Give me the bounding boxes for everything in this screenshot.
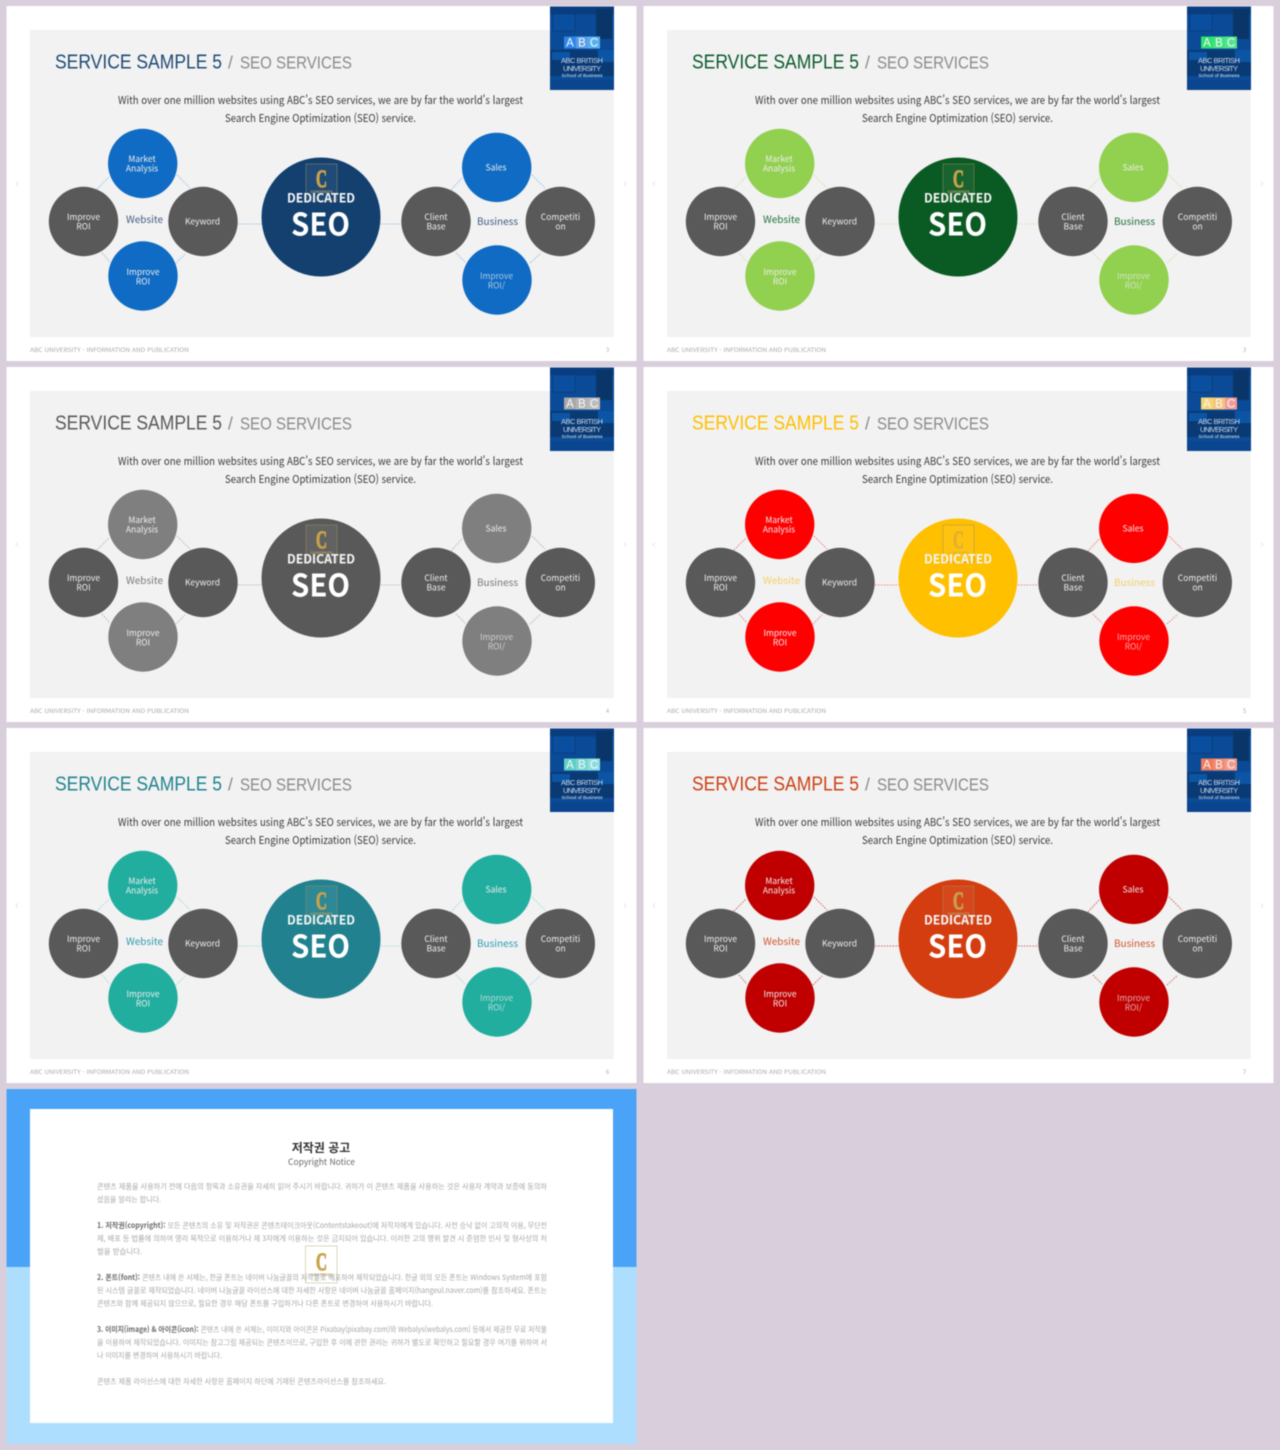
central SEO circle <box>898 880 1018 998</box>
website cluster: Website <box>126 933 164 948</box>
notice text: font: 된 시스템 글꼴로 제작되었습니다. 네이버 나눔글꼴 라이선스에 대한 자세한 사항은 네이버 나눔글꼴 홈페이지(hangeul.naver.com)를 참조하세요. 폰트는 <box>97 1285 547 1296</box>
intro text <box>118 92 523 126</box>
notice text: copyright: 1. 저작권(copyright): 모든 콘텐츠의 소유 및 저작권은 콘텐츠테이크아웃(Contentstakeout)에 저작자에게 있습니다. 사전 승낙 없이 고의적 이용, 무단전 <box>97 1220 547 1231</box>
heading: SEO SERVICES <box>877 52 989 72</box>
business cluster: Base <box>426 942 446 954</box>
navigation arrows: ‹ <box>652 898 656 912</box>
website cluster: ROI <box>773 636 787 648</box>
logo: ABC British University <box>1187 368 1251 451</box>
website cluster: ROI <box>136 636 150 648</box>
business cluster: Client <box>1061 933 1085 945</box>
website cluster: Market <box>128 153 156 165</box>
website cluster: Website <box>763 572 801 587</box>
logo: ABC British University: UNIVERSITY <box>563 786 601 795</box>
business cluster: Base <box>426 582 446 594</box>
heading <box>55 412 352 434</box>
logo: ABC British University <box>1187 728 1251 812</box>
business cluster: Business <box>477 935 518 950</box>
connectors <box>734 897 1182 985</box>
business cluster: Base <box>1063 942 1083 954</box>
central SEO circle: CONTENTS <box>310 550 333 555</box>
website cluster: Analysis <box>763 162 795 174</box>
connectors <box>97 175 545 263</box>
website cluster: ROI <box>713 582 728 594</box>
website cluster <box>686 490 875 672</box>
website cluster: Improve <box>763 266 797 278</box>
navigation arrows: ‹ <box>652 537 656 551</box>
central SEO circle: C <box>316 888 327 915</box>
navigation arrows: ‹ <box>15 176 19 190</box>
footer <box>667 346 1246 354</box>
business cluster: Business <box>1114 213 1155 228</box>
business cluster: ROI/ <box>488 280 506 292</box>
central SEO circle: CONTENTS <box>948 550 970 555</box>
heading <box>692 52 989 74</box>
footer <box>30 1068 609 1076</box>
logo: ABC British University: School of Business <box>562 795 603 801</box>
logo: ABC British University: C <box>590 760 598 772</box>
navigation arrows: › <box>1260 898 1264 912</box>
business cluster: Competiti <box>541 933 580 945</box>
notice text: intro: 셨음을 알리는 합니다. <box>97 1194 161 1205</box>
footer: ABC UNIVERSITY - INFORMATION AND PUBLICATION <box>30 707 189 715</box>
logo: ABC British University: ABC BRITISH <box>1198 417 1240 426</box>
business cluster: on <box>1192 220 1203 232</box>
navigation arrows: ‹ <box>15 537 19 551</box>
navigation arrows: ‹ <box>652 176 656 190</box>
website cluster: Keyword <box>822 216 857 228</box>
central SEO circle: DEDICATED <box>287 188 355 206</box>
heading: SEO SERVICES <box>240 774 352 794</box>
business cluster: on <box>555 220 566 232</box>
navigation arrows <box>15 898 627 912</box>
logo: ABC British University: School of Business <box>1198 434 1240 440</box>
business cluster: Business <box>1114 935 1155 950</box>
logo: ABC British University: UNIVERSITY <box>563 425 601 434</box>
notice text: image and icon: 을 이용하여 제작되었습니다. 이미지는 참고그림 제공되는 콘텐츠이므로, 구입한 후 이에 관한 권리는 귀하가 별도로 확인하고 필요할 경우 여기를 위하여 서 <box>97 1337 547 1348</box>
logo: ABC British University: School of Business <box>562 434 603 440</box>
central SEO circle <box>898 158 1018 276</box>
business cluster <box>401 855 595 1037</box>
central SEO circle: C <box>953 166 964 193</box>
business cluster: Client <box>424 933 448 945</box>
business cluster <box>401 133 595 315</box>
business cluster: Business <box>477 574 518 589</box>
heading: / <box>228 52 233 72</box>
logo: ABC British University: A <box>566 398 574 410</box>
footer: ABC UNIVERSITY - INFORMATION AND PUBLICATION <box>30 346 189 354</box>
intro text: Search Engine Optimization (SEO) service. <box>862 110 1053 126</box>
logo: ABC British University: School of Business <box>562 73 603 79</box>
connectors <box>734 536 1182 624</box>
logo: ABC British University: C <box>1227 760 1235 772</box>
notice text: intro: 콘텐츠 제품을 사용하기 전에 다음의 항목과 소유권을 자세히 읽어 주시기 바랍니다. 귀하가 이 콘텐츠 제품을 사용하는 것은 사용자 계약과 보증에 동의하 <box>97 1181 547 1192</box>
business cluster: Improve <box>480 631 513 643</box>
website cluster: ROI <box>713 942 728 954</box>
business cluster: Improve <box>1117 270 1150 282</box>
heading: SERVICE SAMPLE 5 <box>55 774 222 796</box>
central SEO circle <box>262 518 380 638</box>
website cluster: Improve <box>704 572 737 584</box>
website cluster: Website <box>763 211 801 226</box>
panel: slide 4 yellow and red <box>644 367 1274 722</box>
website cluster: Market <box>765 514 793 526</box>
intro text: Search Engine Optimization (SEO) service. <box>225 471 416 487</box>
central SEO circle: C <box>316 166 327 193</box>
central SEO circle: SEO <box>928 560 987 606</box>
heading: SERVICE SAMPLE 5 <box>692 412 859 434</box>
intro text: With over one million websites using ABC's SEO services, we are by far the world's largest <box>118 92 523 108</box>
website cluster: ROI <box>773 276 787 288</box>
business cluster: Sales <box>486 162 506 174</box>
website cluster: Keyword <box>185 216 220 228</box>
watermark logo: CONTENTS <box>310 1272 333 1277</box>
business cluster <box>1038 855 1232 1037</box>
business cluster: Improve <box>480 270 513 282</box>
central SEO circle: DEDICATED <box>924 188 992 206</box>
central SEO circle: SEO <box>928 922 987 966</box>
panel: slide 3 gray <box>6 367 636 722</box>
navigation arrows: › <box>623 176 627 190</box>
intro text: With over one million websites using ABC's SEO services, we are by far the world's largest <box>755 92 1160 108</box>
navigation arrows <box>652 898 1264 912</box>
business cluster: ROI/ <box>1125 280 1143 292</box>
heading <box>55 52 352 74</box>
business cluster: Business <box>477 213 518 228</box>
heading: SERVICE SAMPLE 5 <box>55 412 222 434</box>
connectors <box>734 175 1182 263</box>
business cluster: Client <box>1061 572 1085 584</box>
central SEO circle: SEO <box>291 560 350 606</box>
website cluster: Analysis <box>126 884 158 896</box>
heading: / <box>228 774 233 794</box>
footer: ABC UNIVERSITY - INFORMATION AND PUBLICATION <box>667 346 826 354</box>
intro text <box>755 92 1160 126</box>
logo: ABC British University: B <box>1215 760 1223 772</box>
intro text: Search Engine Optimization (SEO) service. <box>225 832 416 848</box>
central SEO circle: C <box>953 888 964 915</box>
logo: ABC British University: UNIVERSITY <box>1200 64 1238 73</box>
notice text: font <box>97 1272 547 1309</box>
business cluster <box>1038 494 1232 676</box>
copyright title: 저작권 공고 <box>292 1139 350 1156</box>
logo: ABC British University: ABC BRITISH <box>561 778 603 787</box>
business cluster: Sales <box>486 522 506 534</box>
website cluster: ROI <box>76 220 91 232</box>
logo: ABC British University: ABC BRITISH <box>561 417 603 426</box>
logo: ABC British University: UNIVERSITY <box>1200 425 1238 434</box>
intro text: Search Engine Optimization (SEO) service. <box>862 471 1053 487</box>
website cluster: Improve <box>67 933 100 945</box>
website cluster: ROI <box>136 276 150 288</box>
website cluster: Improve <box>704 211 737 223</box>
connectors <box>97 897 545 985</box>
business cluster: Competiti <box>541 572 580 584</box>
logo: ABC British University: C <box>590 398 598 410</box>
central SEO circle: C <box>316 527 327 554</box>
central SEO circle: SEO <box>928 200 987 244</box>
footer <box>667 707 1246 715</box>
logo: ABC British University: C <box>590 38 598 50</box>
notice text: copyright: 재, 배포 등 법률에 의하여 영리 목적으로 이용하거나 제 3자에게 이용하는 것은 금지되어 있습니다. 이러한 고의 행위 발견 시 준엄한 민사 및 형사상의 처 <box>97 1233 547 1244</box>
logo: ABC British University: UNIVERSITY <box>563 64 601 73</box>
business cluster: Sales <box>1123 162 1143 174</box>
heading: SERVICE SAMPLE 5 <box>692 774 859 796</box>
notice text: font: 2. 폰트(font): 콘텐츠 내에 쓴 서체는, 한글 폰트는 네이버 나눔글꼴의 저작물로 배포하여 제작되었습니다. 한글 외의 모든 폰트는 Windows System에 포함 <box>97 1272 547 1283</box>
central SEO circle <box>898 518 1018 638</box>
notice text: image and icon: 나 이미지를 변경하여 사용하시기 바랍니다. <box>97 1350 222 1361</box>
website cluster <box>49 490 238 672</box>
central SEO circle: DEDICATED <box>924 548 992 568</box>
website cluster: ROI <box>76 942 91 954</box>
website cluster: Keyword <box>185 576 220 588</box>
heading <box>55 774 352 796</box>
notice text: license: 콘텐츠 제품 라이선스에 대한 자세한 사항은 홈페이지 하단에 기재된 콘텐츠라이선스를 참조하세요. <box>97 1376 386 1387</box>
business cluster <box>401 494 595 676</box>
website cluster: Improve <box>763 988 797 1000</box>
website cluster <box>686 129 875 311</box>
central SEO circle: DEDICATED <box>287 548 355 568</box>
logo: ABC British University: UNIVERSITY <box>1200 786 1238 795</box>
panel: slide 6 orange and dark red <box>644 728 1274 1083</box>
copyright title: Copyright Notice <box>288 1156 355 1168</box>
business cluster: Sales <box>1123 522 1143 534</box>
intro text: With over one million websites using ABC's SEO services, we are by far the world's largest <box>755 814 1160 830</box>
notice text: copyright <box>97 1220 547 1257</box>
heading: SERVICE SAMPLE 5 <box>55 52 222 74</box>
heading: SERVICE SAMPLE 5 <box>692 52 859 74</box>
heading <box>692 774 989 796</box>
website cluster: Analysis <box>763 884 795 896</box>
business cluster: Sales <box>486 884 506 896</box>
business cluster: ROI/ <box>488 640 506 652</box>
website cluster: Market <box>128 514 156 526</box>
logo: ABC British University: ABC BRITISH <box>1198 778 1240 787</box>
notice text: intro <box>97 1181 547 1205</box>
copyright title <box>288 1139 355 1168</box>
heading: / <box>865 414 870 434</box>
logo: ABC British University: School of Business <box>1198 73 1240 79</box>
business cluster: ROI/ <box>1125 1002 1143 1014</box>
logo: ABC British University <box>550 6 614 90</box>
central SEO circle: CONTENTS <box>310 911 333 916</box>
footer <box>667 1068 1246 1076</box>
footer <box>30 707 609 715</box>
footer: 6 <box>606 1068 609 1076</box>
logo: ABC British University: A <box>566 38 574 50</box>
logo: ABC British University <box>550 728 614 812</box>
business cluster: Base <box>1063 582 1083 594</box>
website cluster: Analysis <box>763 524 795 536</box>
navigation arrows <box>15 537 627 551</box>
business cluster: Competiti <box>1178 933 1217 945</box>
business cluster <box>1038 133 1232 315</box>
website cluster: Improve <box>763 627 797 639</box>
logo: ABC British University: C <box>1227 38 1235 50</box>
website cluster: Improve <box>704 933 737 945</box>
logo: ABC British University: B <box>578 760 586 772</box>
website cluster: Keyword <box>822 938 857 950</box>
footer: ABC UNIVERSITY - INFORMATION AND PUBLICATION <box>667 707 826 715</box>
central SEO circle: SEO <box>291 200 350 244</box>
website cluster <box>49 851 238 1033</box>
logo: ABC British University: A <box>1203 38 1211 50</box>
website cluster: Improve <box>126 988 160 1000</box>
intro text <box>755 453 1160 487</box>
website cluster: ROI <box>773 998 787 1010</box>
central SEO circle: C <box>953 527 964 554</box>
logo: ABC British University: ABC BRITISH <box>1198 56 1240 65</box>
central SEO circle: SEO <box>291 922 350 966</box>
website cluster: ROI <box>713 220 728 232</box>
website cluster: ROI <box>136 998 150 1010</box>
notice text: image and icon: 3. 이미지(image) & 아이콘(icon): 콘텐츠 내에 쓴 서체는, 이미지와 아이콘은 Pixabay(pixabay.com)와 Webalys(webalys.com) 등에서 제공한 무료 저작물 <box>97 1324 547 1335</box>
website cluster: Improve <box>67 211 100 223</box>
business cluster: on <box>555 942 566 954</box>
footer: ABC UNIVERSITY - INFORMATION AND PUBLICATION <box>30 1068 189 1076</box>
intro text: Search Engine Optimization (SEO) service. <box>225 110 416 126</box>
central SEO circle: DEDICATED <box>924 910 992 928</box>
website cluster: Website <box>763 933 801 948</box>
website cluster: Website <box>126 211 164 226</box>
intro text <box>118 814 523 848</box>
intro text: With over one million websites using ABC's SEO services, we are by far the world's largest <box>755 453 1160 469</box>
business cluster: ROI/ <box>488 1002 506 1014</box>
website cluster: Market <box>765 153 793 165</box>
business cluster: Improve <box>1117 631 1150 643</box>
heading: SEO SERVICES <box>877 414 989 434</box>
website cluster: Analysis <box>126 162 158 174</box>
logo: ABC British University: C <box>1227 398 1235 410</box>
logo: ABC British University: A <box>1203 760 1211 772</box>
logo: ABC British University: School of Business <box>1198 795 1240 801</box>
business cluster: Base <box>426 220 446 232</box>
business cluster: Sales <box>1123 884 1143 896</box>
panel: slide 2 green <box>644 6 1274 361</box>
intro text: With over one million websites using ABC's SEO services, we are by far the world's largest <box>118 814 523 830</box>
notice text: copyright: 벌을 받습니다. <box>97 1246 142 1257</box>
logo: ABC British University: B <box>1215 398 1223 410</box>
notice text: font: 콘텐츠와 함께 제공되지 않으므로, 필요한 경우 해당 폰트를 구입하거나 다른 폰트로 변경하여 사용하시기 바랍니다. <box>97 1298 433 1309</box>
heading <box>692 412 989 434</box>
website cluster: Analysis <box>126 524 158 536</box>
panel: slide 5 teal <box>6 728 636 1083</box>
business cluster: Improve <box>1117 992 1150 1004</box>
heading: SEO SERVICES <box>877 774 989 794</box>
website cluster: Improve <box>126 266 160 278</box>
watermark logo <box>306 1246 337 1283</box>
heading: / <box>865 52 870 72</box>
website cluster: Market <box>765 875 793 887</box>
intro text: With over one million websites using ABC's SEO services, we are by far the world's largest <box>118 453 523 469</box>
business cluster: Business <box>1114 574 1155 589</box>
navigation arrows: › <box>1260 176 1264 190</box>
website cluster <box>49 129 238 311</box>
business cluster: Client <box>424 572 448 584</box>
heading: / <box>865 774 870 794</box>
navigation arrows: › <box>1260 537 1264 551</box>
logo: ABC British University <box>550 368 614 451</box>
logo: ABC British University: ABC BRITISH <box>561 56 603 65</box>
website cluster: Improve <box>126 627 160 639</box>
navigation arrows <box>652 176 1264 190</box>
business cluster: Client <box>1061 211 1085 223</box>
website cluster: Keyword <box>185 938 220 950</box>
footer <box>30 346 609 354</box>
central SEO circle: CONTENTS <box>310 189 333 194</box>
business cluster: Client <box>424 211 448 223</box>
panel: copyright notice <box>6 1089 636 1444</box>
footer: 4 <box>606 707 609 715</box>
business cluster: Competiti <box>541 211 580 223</box>
footer: 5 <box>1243 707 1246 715</box>
logo: ABC British University: B <box>578 398 586 410</box>
central SEO circle: CONTENTS <box>948 911 970 916</box>
central SEO circle <box>262 880 380 998</box>
footer: 7 <box>1243 1068 1246 1076</box>
website cluster <box>686 851 875 1033</box>
heading: SEO SERVICES <box>240 414 352 434</box>
connectors <box>97 536 545 624</box>
navigation arrows: › <box>623 537 627 551</box>
navigation arrows: › <box>623 898 627 912</box>
business cluster: Competiti <box>1178 211 1217 223</box>
intro text: Search Engine Optimization (SEO) service. <box>862 832 1053 848</box>
watermark logo: C <box>316 1249 327 1276</box>
panel: slide 1 blue <box>6 6 636 361</box>
website cluster: ROI <box>76 582 91 594</box>
website cluster: Website <box>126 572 164 587</box>
logo: ABC British University: B <box>578 38 586 50</box>
logo: ABC British University: A <box>1203 398 1211 410</box>
navigation arrows <box>652 537 1264 551</box>
heading: SEO SERVICES <box>240 52 352 72</box>
business cluster: Base <box>1063 220 1083 232</box>
website cluster: Improve <box>67 572 100 584</box>
business cluster: Competiti <box>1178 572 1217 584</box>
business cluster: on <box>1192 582 1203 594</box>
business cluster: on <box>555 582 566 594</box>
business cluster: on <box>1192 942 1203 954</box>
footer: 3 <box>1243 346 1246 354</box>
logo: ABC British University <box>1187 6 1251 90</box>
navigation arrows: ‹ <box>15 898 19 912</box>
logo: ABC British University: A <box>566 760 574 772</box>
intro text <box>755 814 1160 848</box>
central SEO circle: CONTENTS <box>948 189 970 194</box>
central SEO circle: DEDICATED <box>287 910 355 928</box>
website cluster: Keyword <box>822 576 857 588</box>
logo: ABC British University: B <box>1215 38 1223 50</box>
central SEO circle <box>262 158 380 276</box>
business cluster: ROI/ <box>1125 640 1143 652</box>
website cluster: Market <box>128 875 156 887</box>
footer: ABC UNIVERSITY - INFORMATION AND PUBLICATION <box>667 1068 826 1076</box>
intro text <box>118 453 523 487</box>
heading: / <box>228 414 233 434</box>
notice text: image and icon <box>97 1324 547 1361</box>
footer: 3 <box>606 346 609 354</box>
navigation arrows <box>15 176 627 190</box>
business cluster: Improve <box>480 992 513 1004</box>
